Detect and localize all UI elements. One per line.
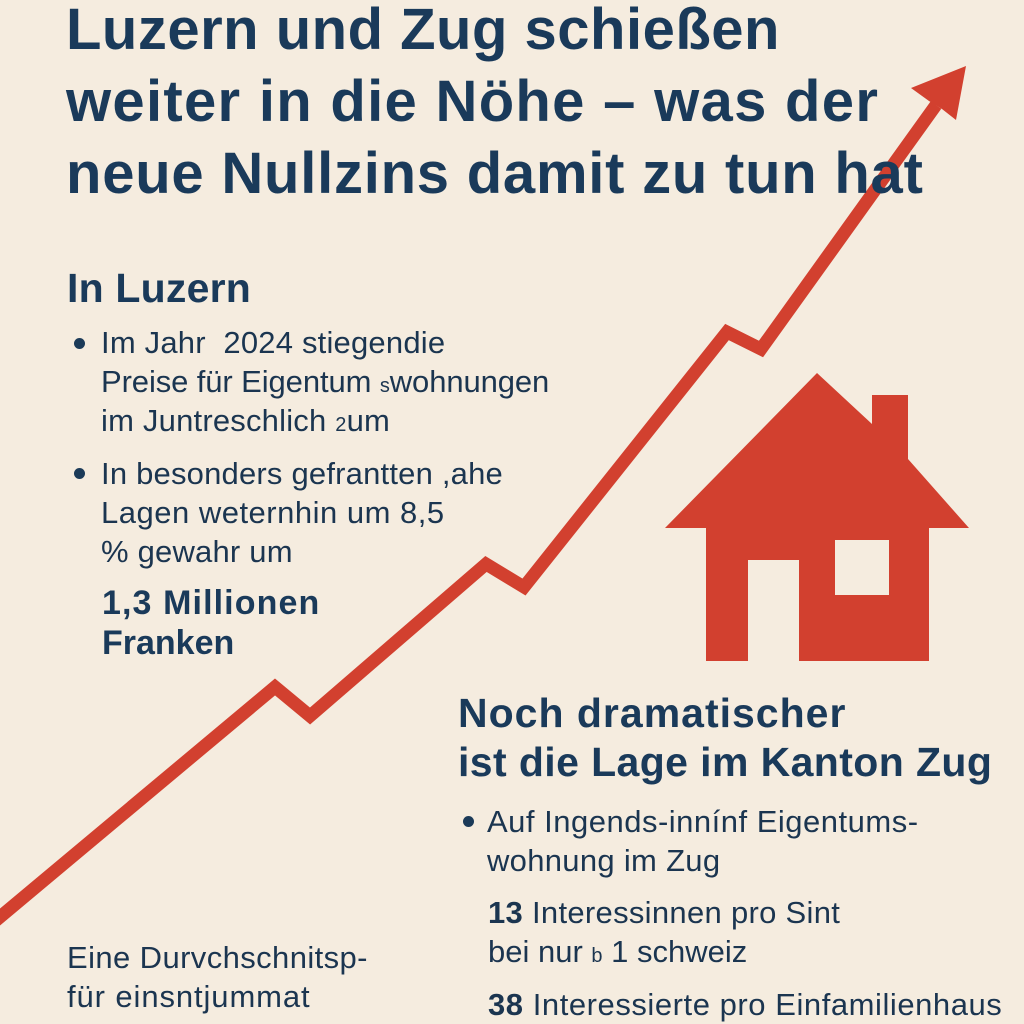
heading: In Luzern: In Luzern — [67, 265, 251, 311]
heading: Kanton Zug: ist die Lage im Kanton Zug — [458, 739, 992, 785]
text block: Luzern bullets — [74, 325, 549, 662]
text block: Zug bullets: wohnung im Zug — [487, 843, 720, 878]
heading: Kanton Zug: Noch dramatischer — [458, 690, 846, 736]
title: neue Nullzins damit zu tun hat — [66, 141, 924, 206]
text block: bottom left note: Eine Durvchschnitsp- — [67, 940, 368, 975]
title: weiter in die Nöhe – was der — [66, 69, 879, 134]
text block: Luzern bullets: Preise für Eigentum swohnungen — [101, 364, 549, 399]
text block: Luzern bullets: Lagen weternhin um 8,5 — [101, 495, 445, 530]
text block: bottom left note: für einsntjummat — [67, 979, 311, 1014]
text block: Zug bullets: 13 Interessinnen pro Sint — [488, 895, 840, 930]
text block: bottom left note — [67, 940, 368, 1014]
text block: Luzern bullets: % gewahr um — [101, 534, 293, 569]
title — [66, 0, 924, 206]
text block: Luzern bullets: Franken — [102, 624, 234, 662]
text block: Zug bullets: bei nur b 1 schweiz — [488, 934, 747, 969]
text block: Luzern bullets: In besonders gefrantten ,ahe — [101, 456, 503, 491]
text block: Zug bullets: Auf Ingends-innínf Eigentums- — [487, 804, 919, 839]
text block: Zug bullets: 38 Interessierte pro Einfamilienhaus — [488, 987, 1002, 1022]
text block: Luzern bullets: 1,3 Millionen — [102, 584, 320, 622]
text block: Luzern bullets: Im Jahr 2024 stiegendie — [101, 325, 445, 360]
text block: Zug bullets — [463, 804, 1002, 1022]
heading: Kanton Zug — [458, 690, 992, 785]
text block: Luzern bullets: im Juntreschlich 2um — [101, 403, 390, 438]
